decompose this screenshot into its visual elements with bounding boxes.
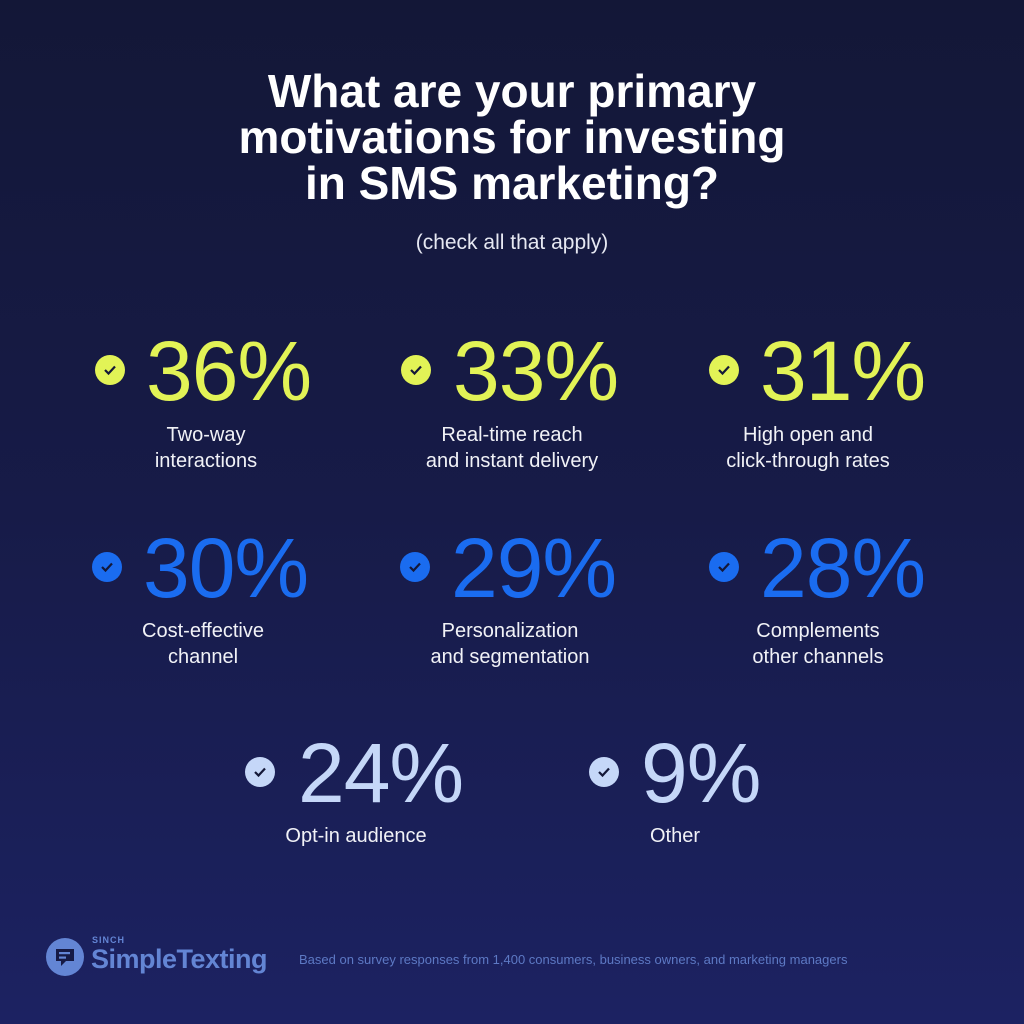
title: motivations for investing [239,111,785,163]
text: Complements [756,620,880,642]
subtitle: (check all that apply) [416,231,608,254]
text: interactions [155,450,257,472]
text: other channels [752,646,884,668]
title [239,65,785,209]
text: 31% [760,324,925,418]
logo: SimpleTexting: SimpleTexting [91,944,267,974]
footnote: Based on survey responses from 1,400 consumers, business owners, and marketing managers [299,952,847,967]
text: 24% [298,726,463,820]
text: Other [650,825,700,847]
text: High open and [743,424,873,446]
title: in SMS marketing? [305,157,719,209]
stat: 28% [709,521,925,668]
stat: 29% [400,521,616,668]
text: 30% [143,521,308,615]
text: 29% [451,521,616,615]
text: and instant delivery [426,450,598,472]
stat: 9% [589,726,760,847]
text: channel [168,646,238,668]
text: 9% [641,726,760,820]
text: Two-way [167,424,245,446]
text: Real-time reach [441,424,583,446]
text: Cost-effective [142,620,264,642]
icon: chat bubble [46,938,84,976]
text: and segmentation [430,646,590,668]
text: 28% [760,521,925,615]
stat: 24% [245,726,463,847]
stat: 30% [92,521,308,668]
text: click-through rates [726,450,890,472]
text: 36% [146,324,311,418]
stat: 31% [709,324,925,472]
text: 33% [453,324,618,418]
stat: 36% [95,324,311,472]
logo: SimpleTexting: SINCH [92,935,125,945]
text: Opt-in audience [285,825,427,847]
title: What are your primary [268,65,756,117]
text: Personalization [442,620,578,642]
logo: SimpleTexting [46,935,267,976]
stat: 33% [401,324,618,472]
